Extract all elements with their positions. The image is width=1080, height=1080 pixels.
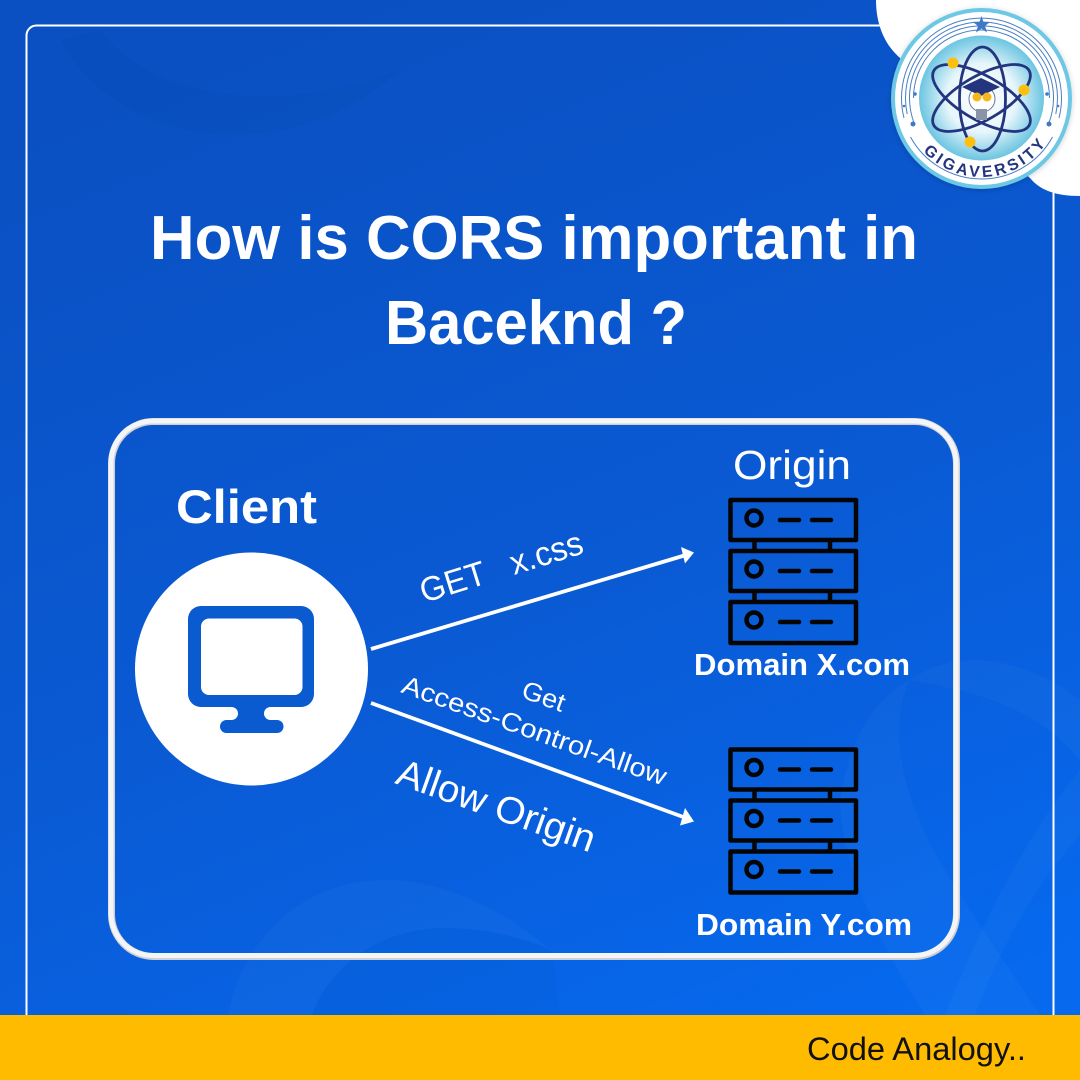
- logo inner disc: [919, 36, 1044, 160]
- logo graduation cap and bulb: [962, 78, 1000, 120]
- title: Baceknd ?: [385, 289, 687, 358]
- icon: server X: [730, 500, 856, 643]
- logo atom orbits: [923, 47, 1040, 151]
- title: How is CORS important in: [150, 204, 918, 273]
- origin label: Origin: [733, 442, 851, 488]
- title: [150, 204, 918, 358]
- arrow label: Get: Get: [518, 674, 570, 718]
- arrow: client to origin: [371, 547, 694, 649]
- icon: monitor: [188, 606, 314, 733]
- logo electrons: [948, 58, 1030, 148]
- arrow label: GET x.css: GET x.css: [415, 524, 588, 611]
- arrow label: Allow Origin: Allow Origin: [391, 752, 601, 861]
- logo rings: [902, 18, 1062, 179]
- arrow: client to domain Y: [371, 703, 694, 826]
- footer text: Code Analogy..: [807, 1031, 1026, 1067]
- panel: diagram: [111, 421, 956, 956]
- domain X label: Domain X.com: [694, 647, 910, 682]
- client label: Client: [176, 480, 317, 533]
- logo ring dots: [903, 92, 1059, 126]
- footer bar: [0, 1015, 1080, 1080]
- logo: Gigaversity: [889, 6, 1074, 192]
- icon: server Y: [730, 750, 856, 892]
- arrow label: Access-Control-Allow: Access-Control-Allow: [398, 669, 671, 791]
- logo wordmark: GIGAVERSITY: [925, 138, 1044, 178]
- domain Y label: Domain Y.com: [696, 907, 912, 942]
- logo star: [973, 16, 990, 32]
- client icon circle: [135, 552, 368, 786]
- white corner blob: [876, 0, 1080, 196]
